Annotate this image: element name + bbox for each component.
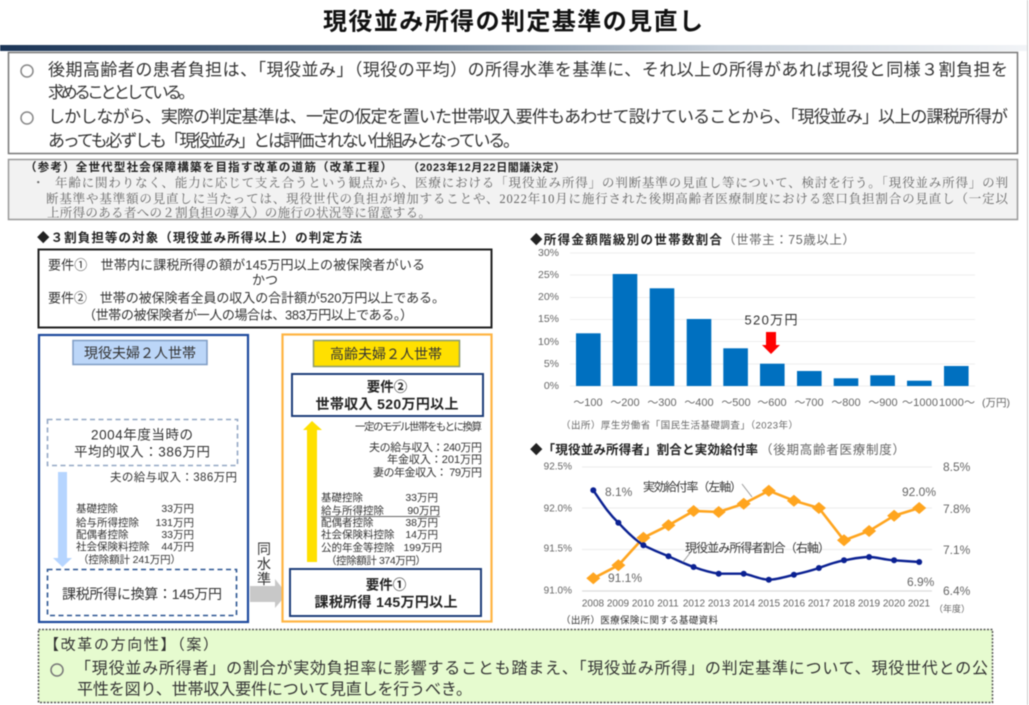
panel: reform direction bbox=[38, 630, 992, 702]
y axis labels: 25% bbox=[538, 269, 559, 281]
model household note: 一定のモデル世帯をもとに換算 bbox=[355, 420, 482, 433]
callout: 520万円: 520万円 bbox=[744, 312, 798, 328]
y axis labels: 0% bbox=[544, 380, 559, 392]
heading: line chart bbox=[530, 442, 905, 457]
panel: requirements bbox=[38, 250, 492, 328]
panel: requirements: かつ bbox=[252, 272, 278, 288]
heading: bar chart bbox=[530, 232, 855, 247]
reference body: 断基準や基準額の見直しに当たっては、現役世代の負担が増加することや、2022年10月に施行された後期高齢者医療制度における窓口負担割合の見直し（一定以 bbox=[46, 191, 1008, 206]
deductions list: 14万円 bbox=[405, 529, 438, 541]
panel title: 高齢夫婦２人世帯 bbox=[330, 346, 442, 362]
deductions list: 配偶者控除 bbox=[321, 516, 374, 529]
bullet 2: しかしながら、実際の判定基準は、一定の仮定を置いた世帯収入要件もあわせて設けていることから、「現役並み」以上の課税所得が bbox=[48, 108, 1008, 126]
x axis labels: (万円) bbox=[982, 397, 1010, 409]
deductions list bbox=[321, 491, 442, 567]
x axis labels: ～200 bbox=[610, 397, 640, 409]
reference heading: （参考）全世代型社会保障構築を目指す改革の道筋（改革工程） bbox=[25, 160, 392, 174]
x axis labels: 2012 bbox=[683, 598, 706, 610]
bullet 1: 後期高齢者の患者負担は、「現役並み」（現役の平均）の所得水準を基準に、それ以上の所得があれば現役と同様３割負担を bbox=[48, 60, 1008, 80]
panel title bbox=[73, 340, 207, 364]
header bar bbox=[0, 45, 1027, 51]
line chart: ratio and benefit rate bbox=[544, 460, 971, 614]
reference body: ・ bbox=[32, 176, 45, 190]
requirement 2 box: 世帯収入 520万円以上 bbox=[316, 396, 458, 412]
heading: bar chart: （世帯主：75歳以上） bbox=[723, 233, 855, 247]
reference date: （2023年12月22日閣議決定） bbox=[408, 160, 565, 174]
income lines: 年金収入：201万円 bbox=[387, 452, 482, 466]
deductions list: （控除額計 374万円） bbox=[326, 554, 426, 567]
x axis labels bbox=[582, 598, 970, 614]
left axis labels bbox=[544, 462, 572, 596]
panel: elderly couple household bbox=[282, 334, 492, 622]
panel title bbox=[314, 340, 460, 366]
taxable income box bbox=[48, 570, 236, 616]
panel: summary of current standard bbox=[8, 52, 1018, 154]
deductions list: 公的年金等控除 bbox=[321, 541, 395, 554]
bar chart: households by income bbox=[538, 247, 1010, 409]
x axis labels: 2013 bbox=[708, 598, 731, 610]
income lines: 夫の給与収入：240万円 bbox=[369, 441, 482, 454]
series label: ratio bbox=[683, 540, 830, 562]
x axis labels: 2019 bbox=[858, 598, 881, 610]
requirement 2 box bbox=[292, 374, 483, 416]
bullet 1 bbox=[21, 60, 1008, 102]
reference body: 年齢に関わりなく、能力に応じて支え合うという観点から、医療における「現役並み所得」の判断基準の見直し等について、検討を行う。「現役並み所得」の判 bbox=[55, 175, 1008, 190]
bars bbox=[576, 274, 969, 386]
deductions list: 基礎控除 bbox=[76, 502, 118, 515]
x axis labels: 2020 bbox=[883, 598, 906, 610]
x axis labels: 2016 bbox=[783, 598, 806, 610]
y axis labels: 10% bbox=[538, 336, 559, 348]
right axis labels: 8.5% bbox=[943, 460, 971, 474]
requirement 1 box: 課税所得 145万円以上 bbox=[314, 594, 458, 610]
deductions list: 33万円 bbox=[161, 503, 194, 515]
arrow: red marker bbox=[762, 332, 780, 354]
panel heading: 【改革の方向性】（案） bbox=[44, 636, 218, 654]
x axis labels: ～800 bbox=[831, 397, 861, 409]
y axis labels: 20% bbox=[538, 291, 559, 303]
x axis labels: 2011 bbox=[657, 598, 679, 610]
x axis labels: ～600 bbox=[757, 397, 787, 409]
arrow: same level bbox=[250, 541, 287, 608]
bullet 1: 求めることとしている。 bbox=[48, 83, 195, 102]
panel: reference note bbox=[8, 160, 1018, 220]
series label: benefit rate: 実効給付率（左軸） bbox=[643, 479, 742, 494]
bar chart source: （出所）厚生労働省「国民生活基礎調査」（2023年） bbox=[561, 420, 798, 432]
data labels: 91.1% bbox=[608, 571, 642, 585]
requirement 2 box: 要件② bbox=[367, 380, 408, 394]
left axis labels: 92.0% bbox=[544, 504, 572, 514]
deductions list: 給与所得控除 bbox=[321, 504, 384, 517]
deductions list: （控除額計 241万円） bbox=[78, 553, 181, 566]
line chart source: （出所）医療保険に関する基礎資料 bbox=[561, 614, 718, 626]
bullet 2 bbox=[21, 108, 1008, 150]
right axis labels bbox=[943, 460, 971, 598]
deductions list: 44万円 bbox=[161, 541, 194, 553]
arrow: up bbox=[303, 421, 322, 562]
reference body: 上所得のある者への２割負担の導入）の施行の状況等に留意する。 bbox=[47, 205, 431, 220]
x axis labels: 2017 bbox=[808, 598, 831, 610]
x axis labels: 2010 bbox=[632, 598, 655, 610]
data labels: 92.0% bbox=[902, 485, 936, 499]
y axis labels: 5% bbox=[544, 358, 559, 370]
arrow: same level: 水 bbox=[257, 556, 271, 572]
arrow: same level: 準 bbox=[257, 571, 271, 587]
x axis labels: 2021 bbox=[908, 598, 931, 610]
left axis labels: 91.0% bbox=[544, 586, 572, 596]
right axis labels: 6.4% bbox=[943, 584, 971, 598]
data labels bbox=[605, 485, 936, 589]
data labels: 8.1% bbox=[605, 485, 633, 499]
x axis labels: ～100 bbox=[573, 397, 603, 409]
x axis labels bbox=[573, 397, 1010, 409]
heading: determination method: ◆３割負担等の対象（現役並み所得以上）の判定方法 bbox=[37, 230, 362, 245]
income lines bbox=[369, 441, 482, 479]
x axis labels: 2008 bbox=[582, 598, 605, 610]
x axis labels: 2009 bbox=[607, 598, 630, 610]
left axis labels: 92.5% bbox=[544, 462, 572, 472]
x axis labels: ～900 bbox=[868, 397, 898, 409]
title: 現役並み所得の判定基準の見直し bbox=[323, 8, 703, 36]
x axis labels: 1000～ bbox=[939, 397, 975, 409]
deductions list: 33万円 bbox=[161, 529, 194, 541]
average income box bbox=[48, 420, 238, 466]
reference body bbox=[32, 175, 1008, 220]
right axis labels: 7.1% bbox=[943, 543, 971, 557]
panel: requirements: （世帯の被保険者が一人の場合は、383万円以上である。） bbox=[83, 308, 413, 322]
deductions list: 33万円 bbox=[405, 492, 438, 504]
x axis labels: ～700 bbox=[794, 397, 824, 409]
right axis labels: 7.8% bbox=[943, 502, 971, 516]
x axis labels: 2018 bbox=[833, 598, 856, 610]
x axis labels: ～400 bbox=[684, 397, 714, 409]
arrow: down bbox=[53, 472, 72, 567]
deductions list: 基礎控除 bbox=[321, 491, 363, 504]
bullet: 平性を図り、世帯収入要件について見直しを行うべき。 bbox=[77, 680, 472, 698]
panel title: 現役夫婦２人世帯 bbox=[84, 345, 196, 361]
series: effective benefit rate bbox=[586, 485, 926, 584]
heading: bar chart: ◆所得金額階級別の世帯数割合 bbox=[530, 232, 722, 247]
deductions list: 38万円 bbox=[405, 517, 438, 529]
deductions list: 給与所得控除 bbox=[76, 516, 139, 529]
x axis labels: 2015 bbox=[758, 598, 781, 610]
deductions list: 131万円 bbox=[155, 517, 194, 529]
arrow: same level: 同 bbox=[257, 541, 271, 557]
deductions list: 社会保険料控除 bbox=[76, 540, 150, 553]
deductions list bbox=[76, 502, 194, 566]
panel: requirements: 要件① 世帯内に課税所得の額が145万円以上の被保険者がいる bbox=[48, 258, 425, 272]
husband salary: 夫の給与収入：386万円 bbox=[110, 471, 237, 484]
data labels: 6.9% bbox=[907, 575, 935, 589]
left axis labels: 91.5% bbox=[544, 544, 572, 554]
x axis labels: ～500 bbox=[721, 397, 751, 409]
bullet: 「現役並み所得者」の割合が実効負担率に影響することも踏まえ、「現役並み所得」の判定基準について、現役世代との公 bbox=[75, 660, 988, 678]
x axis labels: ～1000 bbox=[902, 397, 938, 409]
income lines: 妻の年金収入： 79万円 bbox=[373, 465, 482, 479]
bullet 2: あっても必ずしも「現役並み」とは評価されない仕組みとなっている。 bbox=[48, 132, 520, 150]
deductions list: 社会保険料控除 bbox=[321, 528, 395, 541]
bullet bbox=[51, 660, 988, 698]
deductions list: 199万円 bbox=[403, 542, 442, 554]
average income box: 平均的収入：386万円 bbox=[74, 444, 210, 460]
taxable income box: 課税所得に換算：145万円 bbox=[62, 586, 222, 602]
x axis labels: 2014 bbox=[733, 598, 756, 610]
heading: line chart: （後期高齢者医療制度） bbox=[760, 442, 905, 457]
panel: working couple household bbox=[39, 335, 248, 622]
y axis labels: 30% bbox=[538, 247, 559, 259]
requirement 1 box: 要件① bbox=[366, 578, 407, 592]
panel: requirements: 要件② 世帯の被保険者全員の収入の合計額が520万円以上である。 bbox=[48, 290, 445, 306]
average income box: 2004年度当時の bbox=[91, 428, 193, 442]
series: ratio of active-level earners bbox=[590, 487, 922, 583]
y axis labels: 15% bbox=[538, 313, 559, 325]
deductions list: 配偶者控除 bbox=[76, 528, 129, 541]
series label: ratio: 現役並み所得者割合（右軸） bbox=[685, 540, 830, 555]
x axis labels: ～300 bbox=[647, 397, 677, 409]
y axis labels bbox=[538, 247, 559, 392]
heading: line chart: ◆「現役並み所得者」割合と実効給付率 bbox=[530, 442, 758, 457]
requirement 1 box bbox=[290, 569, 481, 616]
x axis labels: （年度） bbox=[934, 603, 970, 614]
deductions list: 90万円 bbox=[407, 505, 440, 517]
